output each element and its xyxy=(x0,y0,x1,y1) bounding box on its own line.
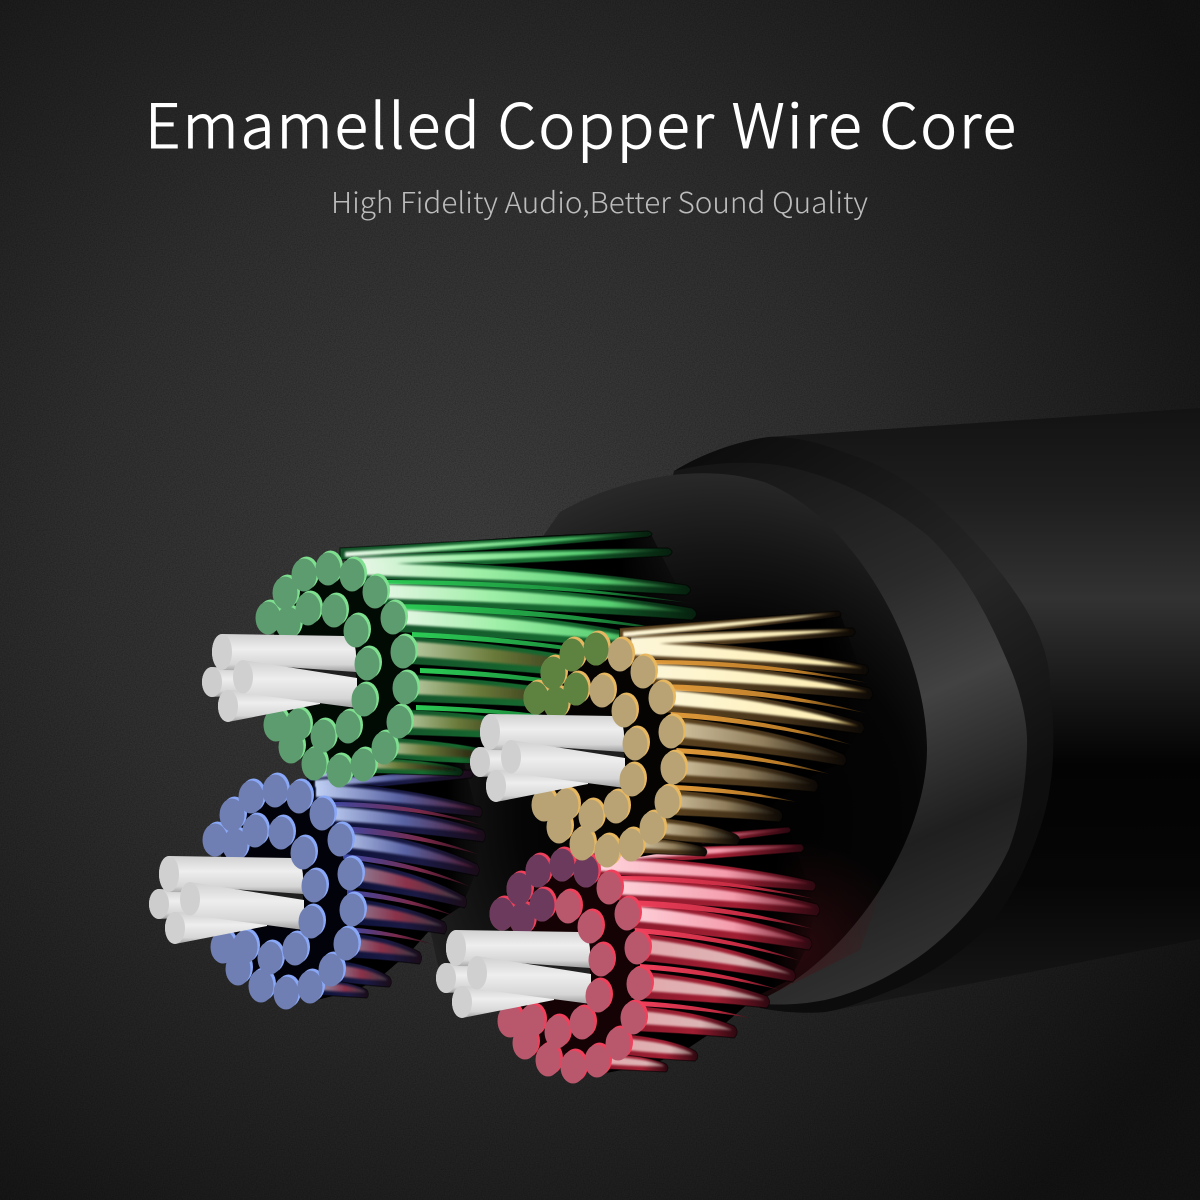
blue strands xyxy=(307,753,485,1000)
subtitle: High Fidelity Audio,Better Sound Quality xyxy=(331,180,868,222)
gold conductor bundle xyxy=(470,611,873,868)
blue conductor bundle xyxy=(149,753,485,1010)
green strand ends xyxy=(202,550,420,788)
gold strands xyxy=(620,611,873,858)
title: Emamelled Copper Wire Core xyxy=(145,77,1018,166)
gold strand ends xyxy=(470,630,688,868)
inner face of cable xyxy=(400,473,927,1005)
blue strand ends xyxy=(149,772,367,1010)
sleeve ring xyxy=(620,463,1027,1005)
green strands xyxy=(340,531,696,778)
cable jacket body xyxy=(760,408,1200,1012)
red strands xyxy=(588,827,820,1074)
green conductor bundle xyxy=(202,531,696,788)
outer rim of jacket xyxy=(674,437,1053,1013)
red strand ends xyxy=(436,846,654,1084)
red conductor bundle xyxy=(436,827,820,1084)
